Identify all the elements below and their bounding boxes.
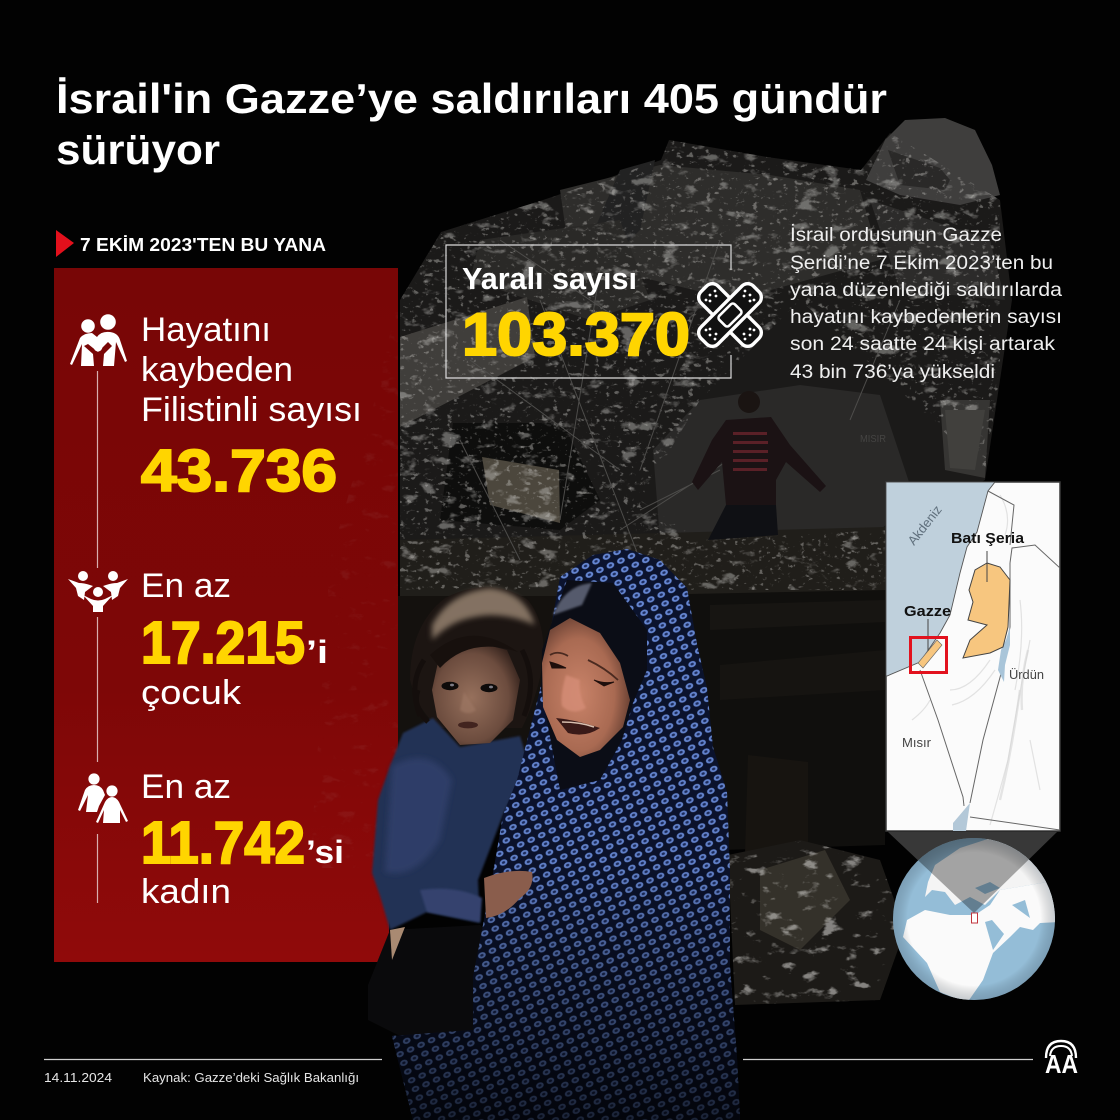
subheading with red marker — [56, 230, 326, 257]
text block: description: son 24 saatte 24 kişi artarak — [790, 334, 1056, 355]
textures — [400, 130, 1000, 600]
map inset: Mısır — [902, 735, 932, 750]
map inset: Ürdün — [1009, 667, 1044, 682]
icon: women — [78, 773, 128, 823]
text: Hayatını kaybeden Filistinli sayısı: Filistinli sayısı — [141, 391, 362, 429]
child leg — [390, 927, 405, 960]
text: En az (women): En az — [141, 768, 231, 806]
woman inner veil — [541, 580, 647, 790]
number: 11.742'si: 11.742 — [141, 810, 305, 876]
background figure: man on rubble — [692, 391, 826, 540]
child hair — [410, 587, 543, 728]
text: kadın: kadın — [141, 873, 231, 911]
diagonal concrete slab — [400, 297, 535, 427]
footer — [44, 1060, 1033, 1085]
number: 11.742'si: ’si — [306, 834, 344, 870]
text: Hayatını kaybeden Filistinli sayısı — [141, 311, 362, 429]
globe locator — [888, 832, 1060, 1003]
number: 43.736: 43.736 — [141, 438, 337, 504]
text: çocuk: çocuk — [141, 674, 242, 712]
map inset — [886, 482, 1060, 831]
lower wall — [640, 590, 888, 850]
text block: description: 43 bin 736’ya yükseldi — [790, 362, 995, 383]
date: 14.11.2024 — [44, 1070, 112, 1085]
dark voids — [440, 423, 600, 530]
background photo: rubble — [398, 118, 1012, 1010]
terrain texture — [912, 495, 1040, 825]
title: İsrail'in Gazze’ye saldırıları 405 gündür — [56, 75, 887, 122]
leader lines — [928, 551, 987, 651]
pale rubble pile right — [945, 410, 985, 470]
watermark: MISIR — [860, 434, 886, 445]
labels: Batı Şeria — [951, 530, 1025, 547]
number: 17.215'i: 17.215 — [141, 610, 305, 676]
Gaza — [918, 640, 942, 668]
main rubble mass — [400, 133, 1012, 600]
lower pile — [728, 840, 905, 1005]
text block: description — [790, 225, 1062, 383]
number: 17.215'i: ’i — [306, 634, 328, 670]
red frame — [910, 638, 946, 672]
map inset: Gazze — [904, 603, 951, 620]
title: sürüyor — [56, 126, 220, 173]
gulf of Aqaba — [953, 803, 970, 831]
continents — [903, 880, 1060, 1003]
child curls — [415, 650, 531, 722]
photo: mother and child — [368, 549, 740, 1120]
West Bank — [963, 563, 1010, 658]
sea — [886, 482, 995, 676]
panel: red statistics — [54, 268, 398, 962]
icon: children — [68, 571, 128, 612]
left dark earth — [398, 596, 560, 760]
wires — [460, 240, 900, 560]
source: Kaynak: Gazze’deki Sağlık Bakanlığı — [143, 1070, 359, 1085]
connector lines — [96, 371, 98, 903]
title — [56, 75, 887, 173]
location marker — [972, 913, 978, 923]
logo: AA: AA — [1045, 1049, 1078, 1079]
borders — [920, 491, 1060, 830]
sky hole — [866, 118, 1000, 205]
text: Hayatını kaybeden Filistinli sayısı: Hayatını — [141, 311, 271, 349]
slab behind the man — [653, 385, 915, 540]
dead sea and river — [998, 627, 1010, 682]
text block: description: hayatını kaybedenlerin sayısı — [790, 307, 1062, 328]
child lower body — [368, 925, 510, 1036]
child hand — [484, 871, 532, 918]
child face — [432, 640, 520, 745]
upper slabs — [560, 165, 880, 300]
child body — [372, 718, 528, 930]
map inset: Akdeniz — [905, 502, 945, 548]
callout: injured count: 103.370 — [462, 301, 690, 368]
text block: description: İsrail ordusunun Gazze — [790, 225, 1002, 246]
subheading with red marker: 7 EKİM 2023'TEN BU YANA — [80, 235, 326, 255]
text: En az (children): En az — [141, 567, 231, 605]
woman scarf — [392, 549, 740, 1120]
woman face — [542, 618, 630, 757]
horizontal ledge — [400, 527, 888, 600]
callout: injured count — [446, 245, 765, 378]
icon: family — [70, 314, 127, 366]
text block: description: yana düzenlediği saldırılarda — [790, 280, 1062, 301]
text block: description: Şeridi’ne 7 Ekim 2023’ten bu — [790, 253, 1053, 274]
text: Hayatını kaybeden Filistinli sayısı: kaybeden — [141, 351, 293, 389]
icon: crossed bandages — [695, 280, 765, 350]
viewing wedge on globe — [918, 838, 1029, 912]
callout: injured count: Yaralı sayısı — [462, 261, 637, 296]
